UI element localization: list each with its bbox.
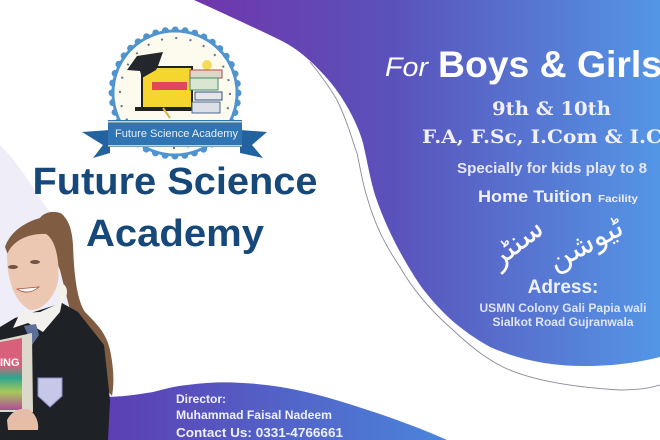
title: Academy [86, 213, 264, 255]
ear [57, 284, 67, 300]
title: Future Science [32, 161, 318, 203]
book [0, 333, 33, 412]
director and contact: Muhammad Faisal Nadeem [176, 410, 332, 422]
eyes [8, 260, 40, 269]
icon: graduation cap [127, 52, 163, 78]
text: address heading: Adress: [528, 277, 598, 298]
blazer [0, 303, 110, 440]
logo badge [82, 30, 267, 158]
heading: for boys and girls: Boys & Girls [438, 44, 660, 85]
decorative edge line [310, 62, 660, 390]
urdu text [480, 209, 630, 278]
text: home tuition: Facility [598, 193, 638, 205]
text: home tuition [478, 187, 638, 206]
photo: student with book [0, 212, 113, 440]
class list: 9th & 10th [492, 98, 611, 120]
icon: laptop [135, 67, 193, 118]
panel: bottom gradient wave [100, 382, 447, 440]
panel: lavender background shape [0, 145, 70, 440]
face [7, 234, 58, 310]
ribbon banner: Future Science Academy [115, 128, 238, 140]
text: home tuition: Home Tuition [478, 187, 592, 206]
text: address: USMN Colony Gali Papia wali [480, 303, 646, 315]
text: address: Sialkot Road Gujranwala [492, 317, 634, 329]
director and contact: Director: [176, 394, 226, 406]
director and contact: Contact Us: 0331-4766661 [176, 425, 343, 440]
tie [24, 324, 39, 345]
hand [7, 409, 38, 430]
school crest [38, 378, 62, 407]
badge scalloped ring [112, 30, 238, 156]
heading: for boys and girls: For [385, 52, 429, 82]
ponytail and hair [5, 212, 113, 396]
ribbon banner [82, 120, 267, 158]
urdu text: سنٹر [480, 210, 550, 276]
class list [422, 98, 660, 148]
urdu text: ٹیوشن [542, 209, 630, 278]
collar [13, 302, 62, 332]
title [32, 161, 318, 255]
smile [17, 287, 39, 292]
photo: student with book: ING [0, 357, 20, 369]
panel: purple-blue gradient wave [194, 0, 660, 366]
class list: F.A, F.Sc, I.Com & I.C [422, 126, 660, 148]
text: address [480, 303, 646, 329]
text: specially for kids: Specially for kids play to 8 [457, 161, 647, 177]
icon: books stack [190, 60, 222, 113]
director and contact [176, 394, 343, 440]
